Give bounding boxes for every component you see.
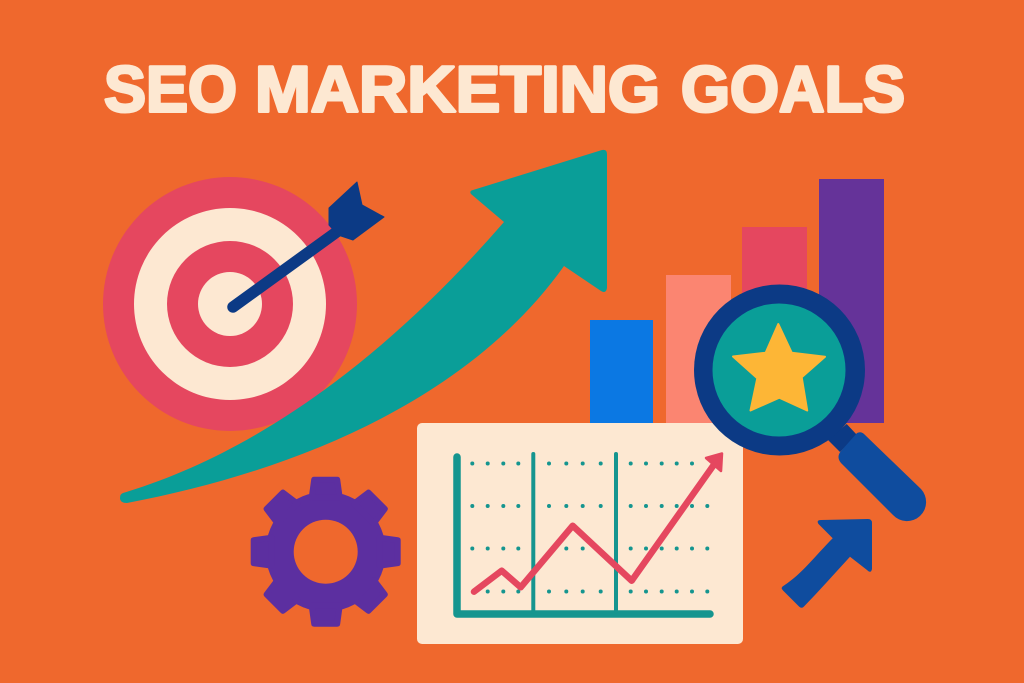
gear body and teeth xyxy=(254,480,398,624)
dart xyxy=(233,182,384,307)
panel: line chart xyxy=(417,423,743,644)
bar: salmon xyxy=(666,275,731,423)
bar: purple xyxy=(819,179,884,423)
big growth arrow xyxy=(120,150,607,503)
title: GOALS xyxy=(681,52,905,126)
title xyxy=(104,52,905,126)
grid dots xyxy=(470,462,709,594)
icon: magnifying glass with star xyxy=(694,284,926,521)
star xyxy=(733,324,825,410)
handle xyxy=(838,432,926,521)
icon: target with dart xyxy=(103,177,384,431)
target rings xyxy=(103,177,357,431)
icon: gear xyxy=(254,480,398,624)
bar chart xyxy=(590,179,884,423)
title: MARKETING xyxy=(255,52,660,126)
handle neck xyxy=(828,424,857,452)
chart axes and gridlines xyxy=(457,454,710,614)
gear hole xyxy=(294,520,358,584)
lens xyxy=(712,304,846,436)
lens rim xyxy=(694,284,865,456)
title: SEO xyxy=(104,52,237,126)
bar: blue xyxy=(590,320,653,423)
bar: red xyxy=(742,227,807,423)
chart card xyxy=(417,423,743,644)
trend line with arrowhead xyxy=(474,454,722,592)
icon: small blue arrow xyxy=(782,519,872,608)
